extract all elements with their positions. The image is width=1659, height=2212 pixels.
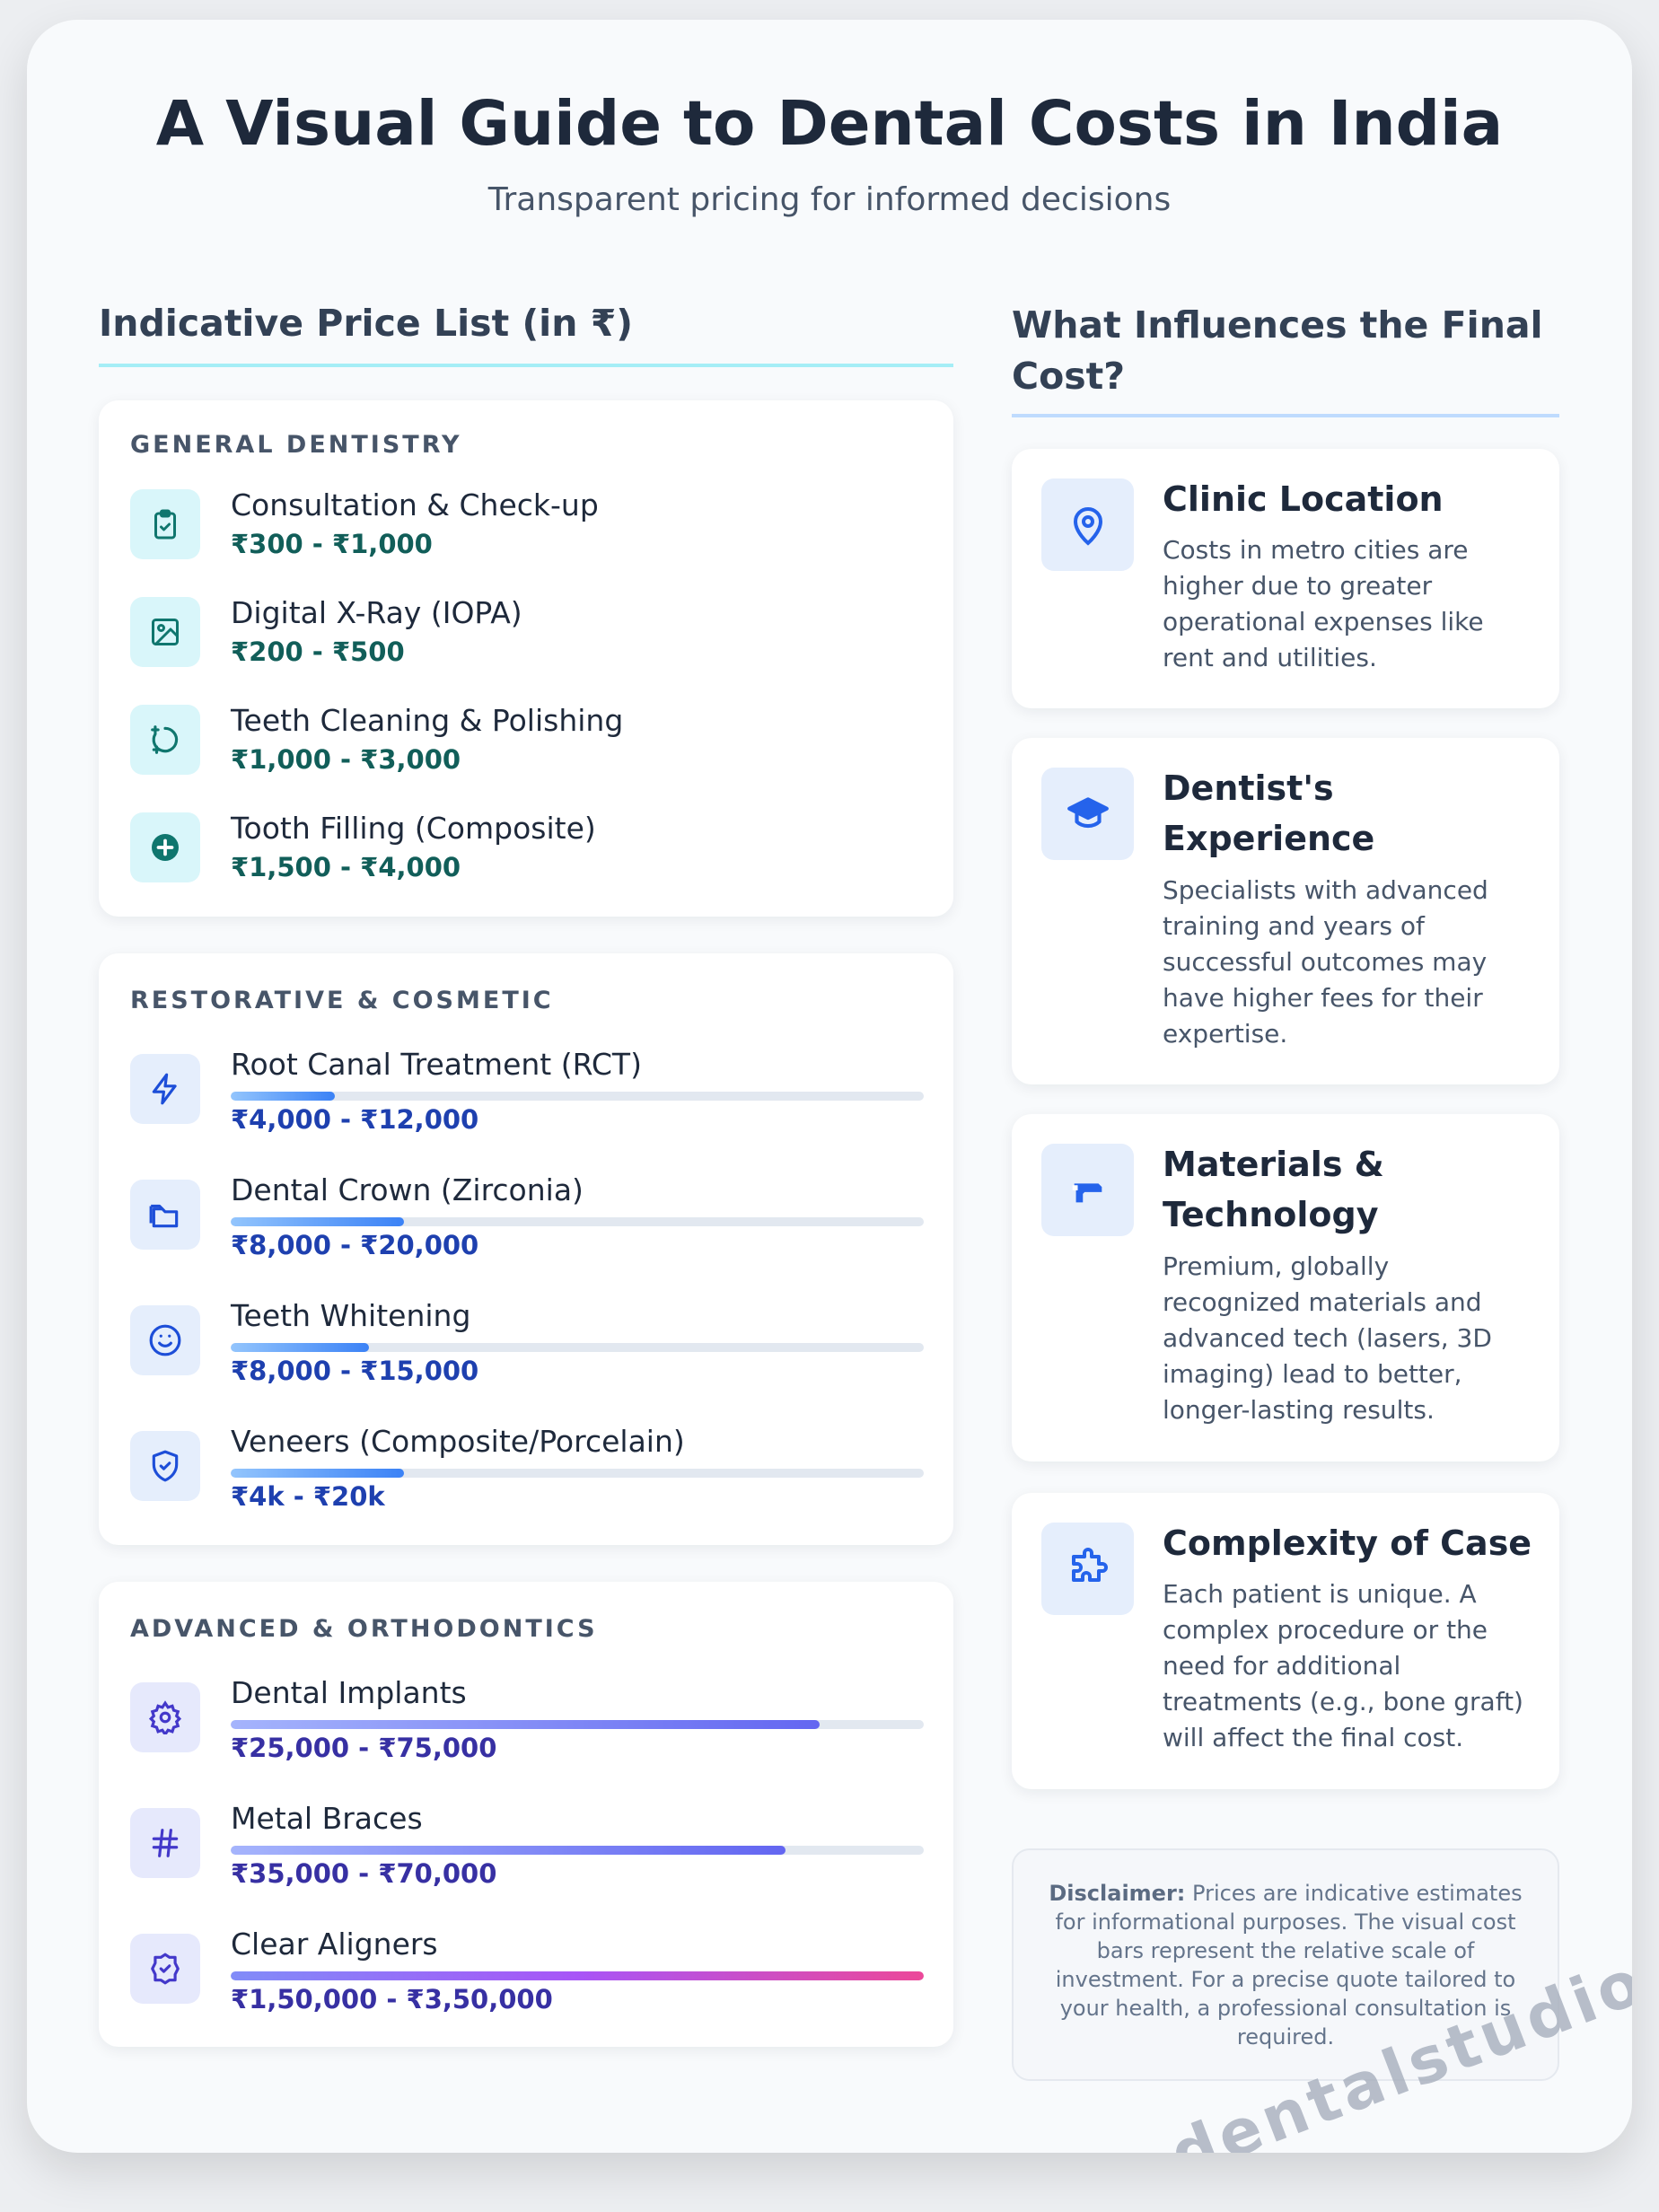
item: x-ray: ₹200 - ₹500 (231, 636, 405, 667)
right heading: What Influences the Final Cost? (1012, 303, 1543, 398)
icon: puzzle (1041, 1523, 1134, 1615)
icon: shield check (130, 1431, 200, 1501)
icon: bolt (130, 1054, 200, 1124)
item: consultation: ₹300 - ₹1,000 (231, 529, 433, 559)
panel: dentist experience: Specialists with advanced training and years of successful outcomes may have higher fees for their expertise. (1163, 875, 1488, 1049)
item: x-ray (130, 595, 522, 667)
disclaimer (1012, 1848, 1559, 2081)
icon: location pin (1041, 478, 1134, 571)
item: whitening: ₹8,000 - ₹15,000 (231, 1356, 478, 1386)
panel: materials & technology: Premium, globally recognized materials and advanced tech (lasers, 3D imaging) lead to better, longer-lasting results. (1163, 1251, 1492, 1425)
item: RCT: ₹4,000 - ₹12,000 (231, 1104, 478, 1135)
panel: materials & technology: Materials & Technology (1163, 1145, 1384, 1234)
panel: restorative & cosmetic (99, 953, 953, 1545)
icon: folder (130, 1180, 200, 1250)
item: consultation (130, 487, 599, 559)
item: braces: Metal Braces (231, 1801, 423, 1836)
icon: image (130, 597, 200, 667)
panel: general dentistry (99, 400, 953, 917)
item: whitening: Teeth Whitening (231, 1298, 470, 1333)
icon: tool (1041, 1144, 1134, 1236)
panel: complexity of case (1012, 1493, 1559, 1789)
item: filling: ₹1,500 - ₹4,000 (231, 852, 461, 882)
item: consultation: Consultation & Check-up (231, 487, 599, 522)
item: crown (130, 1172, 924, 1260)
panel: materials & technology (1012, 1114, 1559, 1462)
panel: advanced & orthodontics (99, 1582, 953, 2047)
icon: gear (130, 1682, 200, 1752)
item: filling: Tooth Filling (Composite) (231, 811, 596, 846)
item: aligners: Clear Aligners (231, 1927, 438, 1962)
disclaimer: Disclaimer: Prices are indicative estimates for informational purposes. The visual cost bars represent the relative scale of investment. For a precise quote tailored to your health, a professional consultation is required. (1049, 1880, 1523, 2049)
item: implants: ₹25,000 - ₹75,000 (231, 1733, 496, 1763)
icon: plus circle (130, 812, 200, 882)
icon: clipboard (130, 489, 200, 559)
item: braces: ₹35,000 - ₹70,000 (231, 1858, 496, 1889)
item: veneers (130, 1424, 924, 1512)
category heading: GENERAL DENTISTRY (130, 431, 462, 459)
panel: dentist experience: Dentist's Experience (1163, 768, 1374, 858)
item: aligners: ₹1,50,000 - ₹3,50,000 (231, 1984, 553, 2014)
item: crown: ₹8,000 - ₹20,000 (231, 1230, 478, 1260)
item: implants: Dental Implants (231, 1675, 467, 1710)
item: implants (130, 1675, 924, 1763)
item: aligners (130, 1927, 924, 2014)
category heading: RESTORATIVE & COSMETIC (130, 987, 554, 1014)
item: braces (130, 1801, 924, 1889)
item: cleaning: Teeth Cleaning & Polishing (231, 703, 623, 738)
panel: clinic location: Costs in metro cities are higher due to greater operational expenses like rent and utilities. (1163, 535, 1484, 672)
panel: clinic location (1012, 449, 1559, 708)
item: filling (130, 811, 596, 882)
icon: badge check (130, 1934, 200, 2004)
item: veneers: ₹4k - ₹20k (231, 1481, 385, 1512)
subtitle: Transparent pricing for informed decisions (488, 181, 1171, 218)
panel: clinic location: Clinic Location (1163, 479, 1444, 519)
panel: complexity of case: Each patient is unique. A complex procedure or the need for additional treatments (e.g., bone graft) will affect the final cost. (1163, 1579, 1523, 1752)
title: A Visual Guide to Dental Costs in India (156, 88, 1503, 160)
item: veneers: Veneers (Composite/Porcelain) (231, 1424, 685, 1459)
category heading: ADVANCED & ORTHODONTICS (130, 1615, 598, 1643)
item: cleaning (130, 703, 623, 775)
icon: graduation cap (1041, 768, 1134, 860)
item: RCT (130, 1047, 924, 1135)
left heading: Indicative Price List (in ₹) (99, 302, 633, 345)
panel: complexity of case: Complexity of Case (1163, 1523, 1532, 1563)
item: cleaning: ₹1,000 - ₹3,000 (231, 744, 461, 775)
item: crown: Dental Crown (Zirconia) (231, 1172, 584, 1207)
icon: hash (130, 1808, 200, 1878)
item: x-ray: Digital X-Ray (IOPA) (231, 595, 522, 630)
item: RCT: Root Canal Treatment (RCT) (231, 1047, 642, 1082)
icon: smile (130, 1305, 200, 1375)
panel: dentist experience (1012, 738, 1559, 1084)
item: whitening (130, 1298, 924, 1386)
icon: sparkle (130, 705, 200, 775)
